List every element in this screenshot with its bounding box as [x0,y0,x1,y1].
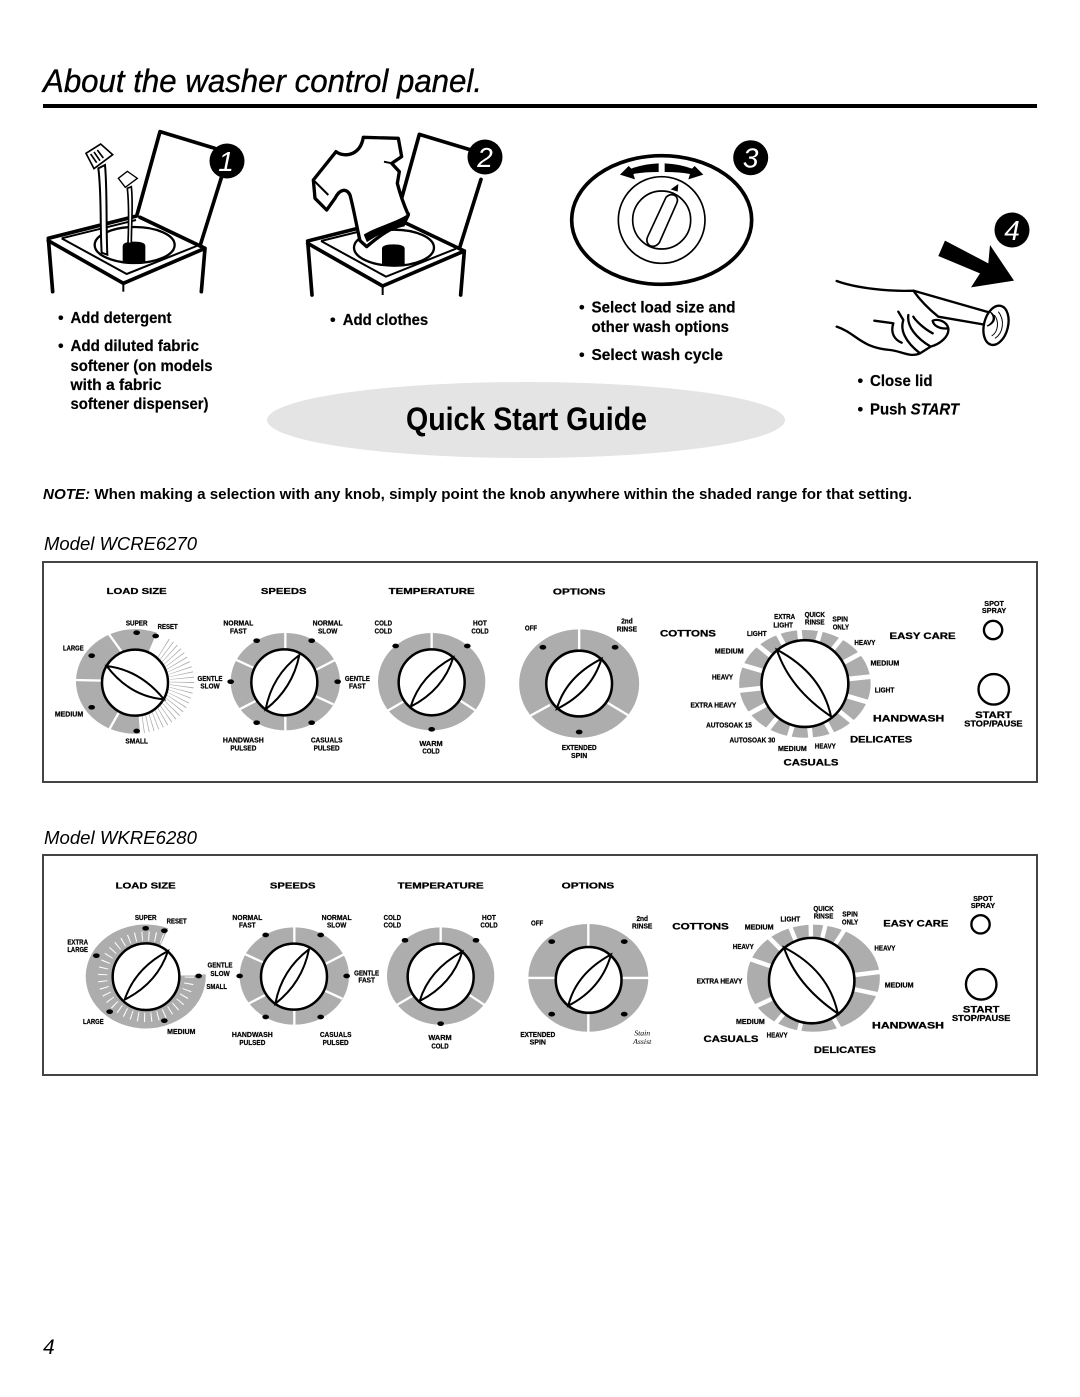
cycle dial: MEDIUM [778,744,807,753]
cycle dial: COTTONS [660,628,716,638]
speeds dial: SPEEDS [270,880,316,890]
step 4: finger pressing start illustration [837,241,1014,355]
cycle dial: SPIN [832,615,848,624]
temperature dial: COLD [471,627,489,636]
step 1 badge: 1 [218,146,234,177]
spot spray and start buttons: START [963,1004,1000,1015]
cycle dial: MEDIUM [715,647,744,656]
cycle dial: HANDWASH [872,1020,944,1030]
load size dial: LOAD SIZE [107,586,167,596]
options dial: OFF [531,918,544,927]
step 1 badge [210,144,244,178]
temperature dial: WARM [428,1033,452,1042]
heading: model WKRE6280: Model WKRE6280 [44,827,198,848]
options dial: 2nd [621,617,633,626]
temperature dial: HOT [473,619,487,628]
options dial: OFF [525,623,537,632]
cycle dial: HEAVY [767,1031,788,1040]
speeds dial: CASUALS [311,736,343,745]
cycle dial: DELICATES [850,735,912,745]
step 3: knob illustration [572,156,752,284]
spot spray and start buttons: SPOT [984,599,1004,608]
load size dial: EXTRA [67,937,89,946]
spot spray and start buttons: STOP/PAUSE [964,720,1023,729]
cycle dial: LIGHT [747,629,767,638]
step 1 text [58,310,213,413]
spot spray and start buttons: SPOT [973,894,993,903]
quick start guide banner [267,382,785,458]
speeds dial: SPEEDS [261,586,307,596]
step 3 badge [733,140,768,175]
options dial: SPIN [571,751,587,760]
step 4 text: Push START [870,402,960,418]
speeds dial: NORMAL [223,619,254,628]
speeds dial: NORMAL [232,913,263,922]
speeds dial: SLOW [200,682,220,691]
load size dial: LOAD SIZE [116,880,176,890]
cycle dial: COTTONS [672,921,729,931]
page number: 4 [43,1336,55,1359]
step 2 badge: 2 [476,142,493,173]
temperature dial: TEMPERATURE [398,880,484,890]
step 1 text: with a fabric [70,377,162,394]
cycle dial: HEAVY [815,742,836,751]
panel: model WKRE6280 [43,855,1037,1075]
step 1 text: softener (on models [70,358,213,375]
load size dial: RESET [158,622,178,631]
step 1 text: • [58,338,64,355]
speeds dial: HANDWASH [223,736,264,745]
load size dial [67,880,227,1036]
cycle dial: ONLY [833,623,849,632]
speeds dial: HANDWASH [232,1030,273,1039]
temperature dial [375,586,489,756]
speeds dial [197,586,370,752]
cycle dial: CASUALS [704,1034,758,1044]
step 4 text: • [858,373,864,390]
load size dial: LARGE [63,644,84,653]
step 4 badge [994,212,1030,248]
temperature dial: COLD [422,747,440,756]
speeds dial: FAST [230,627,247,636]
step 3 text: other wash options [592,319,729,336]
speeds dial: GENTLE [197,674,223,683]
cycle dial: QUICK [805,610,825,619]
panel: model WCRE6270 [43,562,1037,782]
cycle dial [660,606,956,767]
cycle dial: HEAVY [874,943,895,952]
cycle dial: EXTRA HEAVY [691,700,736,709]
step 4 text: Close lid [870,373,932,390]
options dial: SPIN [530,1038,546,1047]
load size dial: MEDIUM [167,1027,195,1036]
cycle dial: EASY CARE [890,631,956,641]
temperature dial [384,880,498,1050]
cycle dial: MEDIUM [871,659,899,668]
temperature dial: COLD [375,627,392,636]
speeds dial: FAST [349,682,366,691]
step 2 badge [468,140,502,174]
speeds dial: PULSED [323,1038,349,1047]
step 1 text: Add diluted fabric [70,338,199,355]
cycle dial: RINSE [805,618,825,627]
cycle dial: HEAVY [733,942,754,951]
cycle dial: MEDIUM [745,922,774,931]
cycle dial: ONLY [842,918,858,927]
speeds dial: SLOW [318,627,337,636]
speeds dial: NORMAL [322,913,352,922]
temperature dial: COLD [480,921,498,930]
speeds dial: FAST [358,976,375,985]
load size dial: SUPER [126,619,148,628]
speeds dial: GENTLE [207,961,233,970]
speeds dial: NORMAL [313,619,343,628]
speeds dial: PULSED [314,743,340,752]
cycle dial: LIGHT [773,621,793,630]
options dial: 2nd [636,914,648,923]
heading: model WCRE6270: Model WCRE6270 [44,533,198,554]
cycle dial: SPIN [842,910,858,919]
cycle dial: MEDIUM [885,981,914,990]
step 4 badge: 4 [1004,215,1020,246]
title rule [43,104,1037,108]
speeds dial: GENTLE [354,968,379,977]
cycle dial: DELICATES [814,1045,876,1055]
load size dial: RESET [167,916,187,925]
load size dial: SMALL [125,736,148,745]
temperature dial: COLD [375,619,392,628]
step 3 text [579,300,736,364]
speeds dial: CASUALS [320,1030,352,1039]
cycle dial: EXTRA HEAVY [697,977,742,986]
load size dial: LARGE [83,1017,104,1026]
spot spray and start buttons [952,894,1010,1023]
load size dial: LARGE [67,945,88,954]
cycle dial: EXTRA [774,612,796,621]
cycle dial: LIGHT [781,915,801,924]
load size dial [55,586,182,745]
step 4 text [858,373,960,418]
step 4 text: • [858,402,864,418]
cycle dial: CASUALS [784,757,838,767]
temperature dial: COLD [384,913,401,922]
cycle dial: AUTOSOAK 30 [730,736,775,745]
speeds dial: SLOW [327,921,346,930]
step 1: add detergent illustration [48,132,222,292]
temperature dial: WARM [419,739,443,748]
options dial: RINSE [632,922,652,931]
options dial: EXTENDED [520,1030,556,1039]
note: NOTE: When making a selection with any knob, simply point the knob anywhere within the shaded range for that setting. [43,486,912,503]
options dial [520,881,652,1047]
cycle dial: EASY CARE [883,919,948,929]
cycle dial: AUTOSOAK 15 [706,720,752,729]
load size dial: SUPER [135,913,157,922]
cycle dial [672,899,948,1059]
step 1 text: Add detergent [70,310,172,327]
step 1 text: softener dispenser) [70,396,208,413]
options dial: RINSE [617,625,637,634]
speeds dial: SLOW [210,969,230,978]
spot spray and start buttons: STOP/PAUSE [952,1014,1010,1023]
cycle dial: HEAVY [712,672,733,681]
speeds dial: FAST [239,921,256,930]
title: About the washer control panel. [41,63,482,99]
options dial: EXTENDED [562,743,597,752]
quick start guide banner: Quick Start Guide [406,401,647,437]
options dial: OPTIONS [553,586,606,596]
cycle dial: LIGHT [875,686,895,695]
options dial [519,586,639,760]
cycle dial: HEAVY [854,638,875,647]
spot spray and start buttons: SPRAY [982,606,1006,615]
options dial: Assist [632,1037,652,1046]
step 3 badge: 3 [743,143,759,174]
temperature dial: HOT [482,913,496,922]
options dial: OPTIONS [562,881,615,891]
cycle dial: MEDIUM [736,1017,765,1026]
step 3 text: Select wash cycle [592,347,723,364]
options dial: Stain [634,1029,650,1038]
step 2 text: • [330,312,336,329]
temperature dial: TEMPERATURE [389,586,475,596]
speeds dial: PULSED [230,743,256,752]
spot spray and start buttons: START [975,710,1012,721]
speeds dial: PULSED [239,1038,265,1047]
step 1 text: • [58,310,64,327]
step 2: add clothes illustration [308,134,481,295]
step 3 text: Select load size and [592,300,736,316]
spot spray and start buttons [964,599,1023,729]
step 3 text: • [579,347,585,364]
cycle dial: RINSE [814,912,833,921]
spot spray and start buttons: SPRAY [971,901,995,910]
temperature dial: COLD [384,921,401,930]
cycle dial: HANDWASH [873,714,944,724]
load size dial: MEDIUM [55,710,83,719]
speeds dial: GENTLE [345,674,370,683]
temperature dial: COLD [431,1041,449,1050]
load size dial: SMALL [206,982,227,991]
cycle dial: QUICK [813,904,834,913]
speeds dial [207,880,379,1047]
step 3 text: • [579,300,585,316]
step 2 text: Add clothes [343,312,428,329]
